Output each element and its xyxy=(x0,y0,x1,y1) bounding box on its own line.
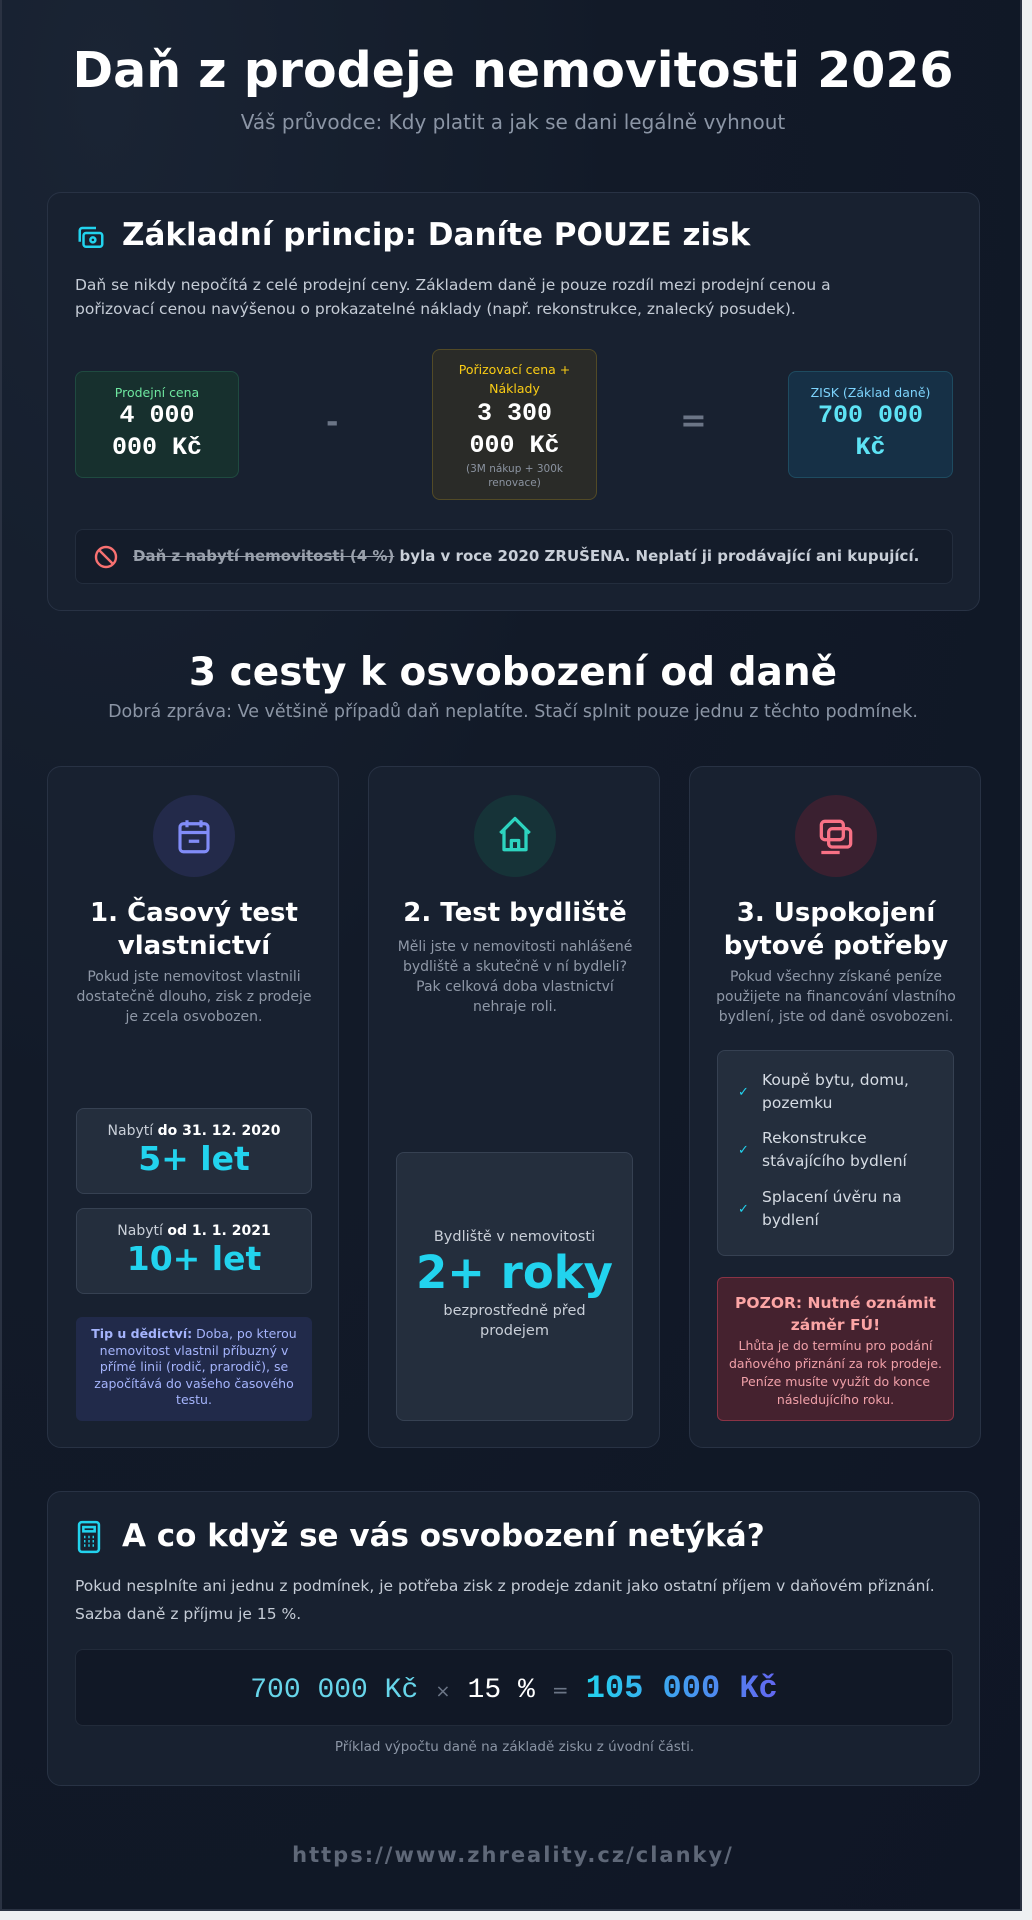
box: profit: 700 000 xyxy=(818,401,923,430)
heading: bytové potřeby xyxy=(724,931,948,961)
panel: residence test xyxy=(368,766,660,1448)
icon: house xyxy=(474,795,556,877)
icon: money xyxy=(78,226,104,248)
list of uses: Koupě bytu, domu, xyxy=(762,1071,909,1089)
heading xyxy=(90,896,298,961)
box: until 2020: Nabytí do 31. 12. 2020 xyxy=(108,1123,280,1139)
text: Měli jste v nemovitosti nahlášené bydliště a skutečně v ní bydleli? Pak celková doba vlastnictví nehraje roli. xyxy=(398,939,632,1015)
heading: vlastnictví xyxy=(118,931,270,961)
box: purchase cost: (3M nákup + 300k xyxy=(466,462,563,474)
icon: prohibited xyxy=(94,546,118,568)
caption: Příklad výpočtu daně na základě zisku z úvodní části. xyxy=(335,1739,694,1755)
box: from 2021 xyxy=(76,1208,312,1294)
box: purchase cost: Pořizovací cena + xyxy=(459,362,570,376)
formula xyxy=(75,1649,953,1726)
callout: abolished tax: Daň z nabytí nemovitosti (4 %) byla v roce 2020 ZRUŠENA. Neplatí ji prodávající ani kupující. xyxy=(133,547,919,565)
icon: calendar xyxy=(153,795,235,877)
box: 2+ years: prodejem xyxy=(480,1323,549,1339)
text: Pokud nesplníte ani jednu z podmínek, je potřeba zisk z prodeje zdanit jako ostatní příjem v daňovém přiznání. Sazba daně z příjmu je 15 %. xyxy=(75,1577,935,1623)
icon: bills xyxy=(795,795,877,877)
warning box: POZOR: Nutné oznámit záměr FÚ! xyxy=(735,1294,936,1334)
subheading: Dobrá zpráva: Ve většině případů daň neplatíte. Stačí splnit pouze jednu z těchto podmínek. xyxy=(108,702,918,722)
heading: 3. Uspokojení xyxy=(737,898,935,928)
heading: A co když se vás osvobození netýká? xyxy=(122,1518,765,1554)
box: from 2021: 10+ let xyxy=(127,1239,261,1278)
heading: 1. Časový test xyxy=(90,898,298,928)
box: purchase cost: renovace) xyxy=(488,476,541,488)
text: Pokud všechny získané peníze použijete na financování vlastního bydlení, jste od daně osvobozeni. xyxy=(716,969,956,1025)
list of uses: Splacení úvěru na xyxy=(762,1188,902,1206)
box: 2+ years: bezprostředně před xyxy=(443,1303,586,1319)
box: sale price: 4 000 xyxy=(119,401,194,430)
box: profit xyxy=(788,371,953,478)
list of uses: ✓ xyxy=(738,1143,749,1158)
box: purchase cost: Náklady xyxy=(489,380,540,396)
box: until 2020: 5+ let xyxy=(138,1139,250,1178)
heading: 2. Test bydliště xyxy=(403,898,627,928)
list of uses xyxy=(717,1050,954,1256)
list of uses: ✓ xyxy=(738,1202,749,1217)
icon: calculator xyxy=(78,1520,100,1554)
text: Pokud jste nemovitost vlastnili dostatečně dlouho, zisk z prodeje je zcela osvobozen. xyxy=(77,969,311,1025)
text: Daň se nikdy nepočítá z celé prodejní ceny. Základem daně je pouze rozdíl mezi prodejní cenou a pořizovací cenou navýšenou o prokazatelné náklady (např. rekonstrukce, znalecký posudek). xyxy=(75,276,831,318)
panel: housing need xyxy=(689,766,981,1448)
box: purchase cost xyxy=(432,349,597,500)
box: profit: ZISK (Základ daně) xyxy=(811,385,930,400)
list of uses: ✓ xyxy=(738,1085,749,1100)
heading: Základní princip: Daníte POUZE zisk xyxy=(122,217,750,253)
box: 2+ years xyxy=(396,1152,633,1421)
formula: 700 000 Kč × 15 % = 105 000 Kč xyxy=(250,1670,778,1707)
box: 2+ years: 2+ roky xyxy=(416,1246,613,1299)
panel: basic principle xyxy=(47,192,980,611)
panel: tax calculation xyxy=(47,1491,980,1786)
box: from 2021: Nabytí od 1. 1. 2021 xyxy=(117,1223,271,1239)
list of uses: Rekonstrukce xyxy=(762,1129,867,1147)
warning box: Lhůta je do termínu pro podání daňového přiznání za rok prodeje. Peníze musíte využít do konce následujícího roku. xyxy=(729,1338,942,1407)
tip: inheritance xyxy=(76,1317,312,1421)
list of uses: bydlení xyxy=(762,1211,819,1229)
heading xyxy=(724,898,948,961)
box: profit: Kč xyxy=(855,433,886,462)
list of uses: stávajícího bydlení xyxy=(762,1152,907,1170)
box: sale price xyxy=(75,371,239,478)
list of uses: pozemku xyxy=(762,1094,832,1112)
tip: inheritance: Tip u dědictví: Doba, po kterou nemovitost vlastnil příbuzný v přímé linii (rodič, prarodič), se započítává do vašeho časového testu. xyxy=(91,1326,297,1407)
panel: time test xyxy=(47,766,339,1448)
subtitle: Váš průvodce: Kdy platit a jak se dani legálně vyhnout xyxy=(241,110,785,134)
heading: 3 ways: 3 cesty k osvobození od daně xyxy=(189,650,837,695)
box: purchase cost: 000 Kč xyxy=(469,430,560,460)
box: until 2020 xyxy=(76,1108,312,1194)
box: 2+ years: Bydliště v nemovitosti xyxy=(434,1229,595,1245)
equals: = xyxy=(680,401,707,439)
warning box xyxy=(717,1277,954,1421)
callout: abolished tax xyxy=(75,529,953,584)
minus: - xyxy=(326,405,338,440)
box: sale price: 000 Kč xyxy=(112,433,202,462)
box: sale price: Prodejní cena xyxy=(115,385,199,400)
title: Daň z prodeje nemovitosti 2026 xyxy=(72,42,954,99)
box: purchase cost: 3 300 xyxy=(477,398,552,428)
footer url: https://www.zhreality.cz/clanky/ xyxy=(292,1843,734,1867)
